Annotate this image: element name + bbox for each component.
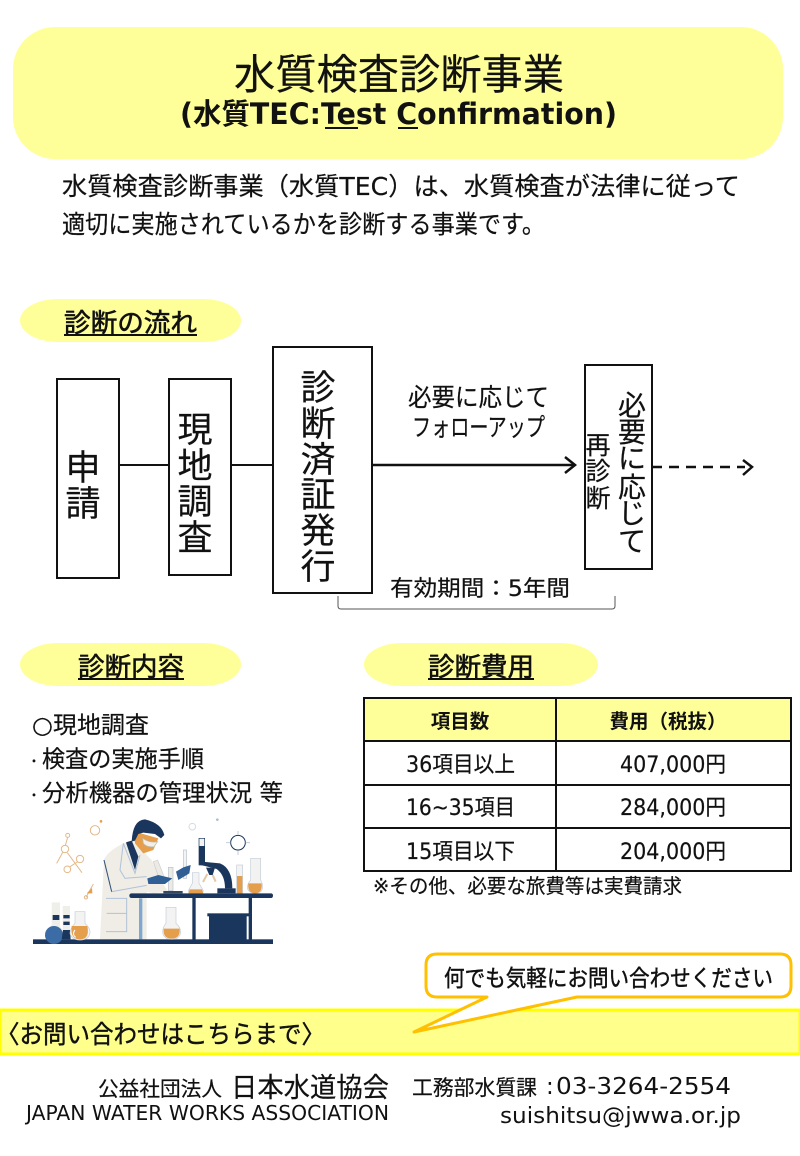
heading: cost xyxy=(364,643,598,686)
flask under bench xyxy=(163,907,181,939)
arrow: follow-up xyxy=(372,457,575,473)
scientist xyxy=(100,819,203,939)
title: 水質検査診断事業 xyxy=(234,50,564,99)
intro text: 水質検査診断事業（水質TEC）は、水質検査が法律に従って xyxy=(62,172,740,201)
table header: 項目数 xyxy=(431,710,490,733)
organization name xyxy=(24,1073,389,1125)
heading: flow: 診断の流れ xyxy=(64,309,197,339)
content list: ･ xyxy=(30,752,38,771)
heading: cost: 診断費用 xyxy=(428,653,534,683)
content list: ○現地調査 xyxy=(32,711,149,739)
flasks at left xyxy=(45,902,90,944)
subtitle: (水質TEC:Test Confirmation) xyxy=(180,97,617,131)
molecule decorations xyxy=(57,818,219,899)
box: certificate issue: 診断済証発行 xyxy=(300,369,336,588)
content list xyxy=(30,711,283,807)
intro text xyxy=(62,172,740,239)
table rows: 284,000円 xyxy=(620,796,726,821)
organization name: JAPAN WATER WORKS ASSOCIATION xyxy=(24,1101,389,1125)
content list: ･ xyxy=(30,786,38,805)
flow diagram xyxy=(57,347,752,609)
table header: 費用（税抜） xyxy=(609,710,727,733)
callout xyxy=(414,954,791,1032)
table rows: 204,000円 xyxy=(620,840,726,865)
content list: 分析機器の管理状況 等 xyxy=(42,779,283,807)
table rows: 407,000円 xyxy=(620,753,726,778)
cost table xyxy=(364,698,791,871)
content list: 検査の実施手順 xyxy=(42,745,204,773)
box: site survey: 現地調査 xyxy=(177,411,213,559)
follow-up label xyxy=(408,383,549,442)
box: re-diagnosis: 再診断 xyxy=(585,431,611,513)
contact details xyxy=(412,1074,741,1129)
contact banner xyxy=(0,1010,800,1054)
follow-up label: 必要に応じて xyxy=(408,383,549,412)
arrow: dashed xyxy=(652,460,752,475)
table rows: 36項目以上 xyxy=(406,753,515,778)
box: application xyxy=(57,379,119,578)
table note: ※その他、必要な旅費等は実費請求 xyxy=(373,874,682,898)
box: re-diagnosis xyxy=(585,365,652,569)
contact details: suishitsu@jwwa.or.jp xyxy=(500,1104,741,1129)
box: re-diagnosis: 必要に応じて xyxy=(618,389,646,558)
header panel xyxy=(13,27,783,159)
follow-up label: フォローアップ xyxy=(412,413,545,442)
contact details: 工務部水質課 xyxy=(412,1076,537,1100)
organization name: 公益社団法人 xyxy=(98,1077,222,1101)
box: application: 申請 xyxy=(65,449,101,525)
illustration: scientist in lab xyxy=(33,818,273,944)
microscope and glassware xyxy=(189,823,263,893)
heading: flow xyxy=(20,299,241,342)
contact details: : xyxy=(546,1074,554,1100)
connector lines xyxy=(119,464,273,466)
contact details: 03-3264-2554 xyxy=(556,1074,731,1100)
box: site survey xyxy=(169,379,231,575)
validity bracket xyxy=(338,577,615,609)
intro text: 適切に実施されているかを診断する事業です。 xyxy=(62,210,545,239)
lab bench xyxy=(33,893,273,944)
table rows xyxy=(406,753,726,865)
heading: content: 診断内容 xyxy=(78,653,184,683)
validity bracket: 有効期間：5年間 xyxy=(390,577,570,602)
organization name: 日本水道協会 xyxy=(231,1073,389,1104)
box: certificate issue xyxy=(273,347,372,593)
contact banner: 〈お問い合わせはこちらまで〉 xyxy=(0,1020,325,1049)
table rows: 15項目以下 xyxy=(406,840,515,865)
table header xyxy=(431,710,727,733)
table rows: 16~35項目 xyxy=(406,796,515,821)
heading: content xyxy=(20,643,241,686)
